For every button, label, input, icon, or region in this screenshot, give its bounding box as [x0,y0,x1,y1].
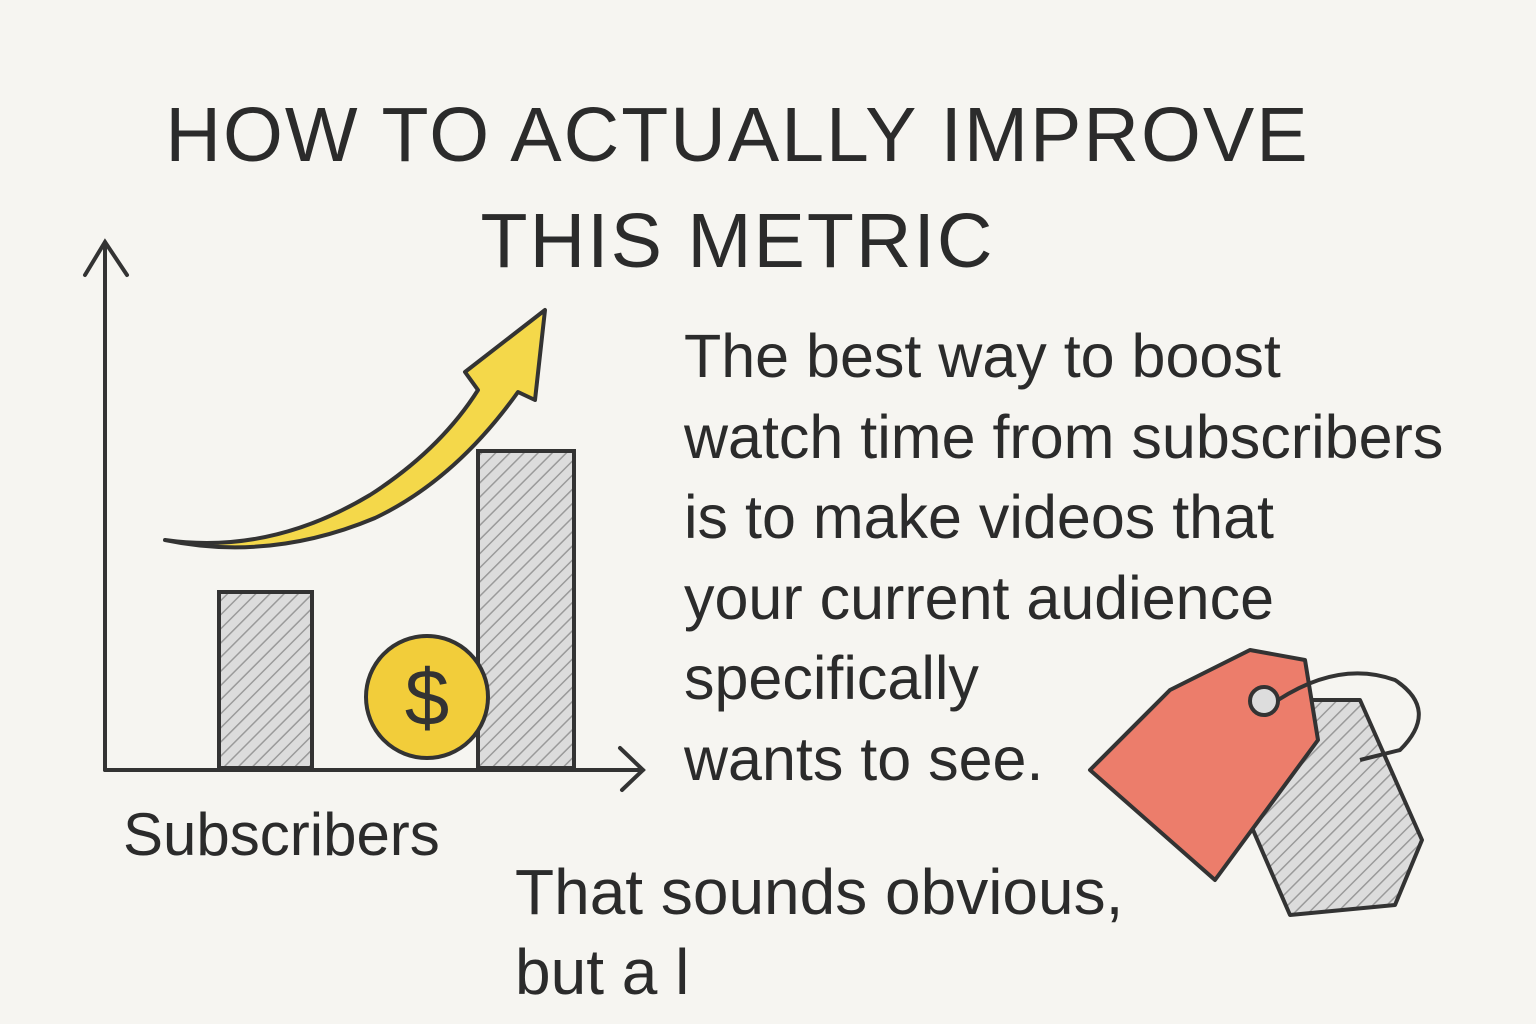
title: THIS METRIC [481,198,994,284]
text block: continuation: but a l [515,936,689,1008]
title [165,92,1310,284]
text block: continuation [515,856,1123,1008]
label: subscribers: Subscribers [123,801,440,868]
icon: coin: $ [405,653,449,742]
text block: main: watch time from subscribers [684,402,1443,470]
icon: coin [366,636,488,758]
bar small [219,592,312,768]
text block: main: is to make videos that [684,483,1274,551]
axes [85,242,643,790]
text block: main: your current audience [684,564,1274,632]
text block: main [684,322,1443,792]
text block: continuation: That sounds obvious, [515,856,1123,928]
title: HOW TO ACTUALLY IMPROVE [165,92,1310,178]
bar tall [478,451,574,768]
text block: main: wants to see. [684,724,1043,792]
text block: main: specifically [684,644,979,712]
icon: tags [1090,650,1422,915]
text block: main: The best way to boost [684,322,1281,390]
arrow: growth [165,310,545,547]
